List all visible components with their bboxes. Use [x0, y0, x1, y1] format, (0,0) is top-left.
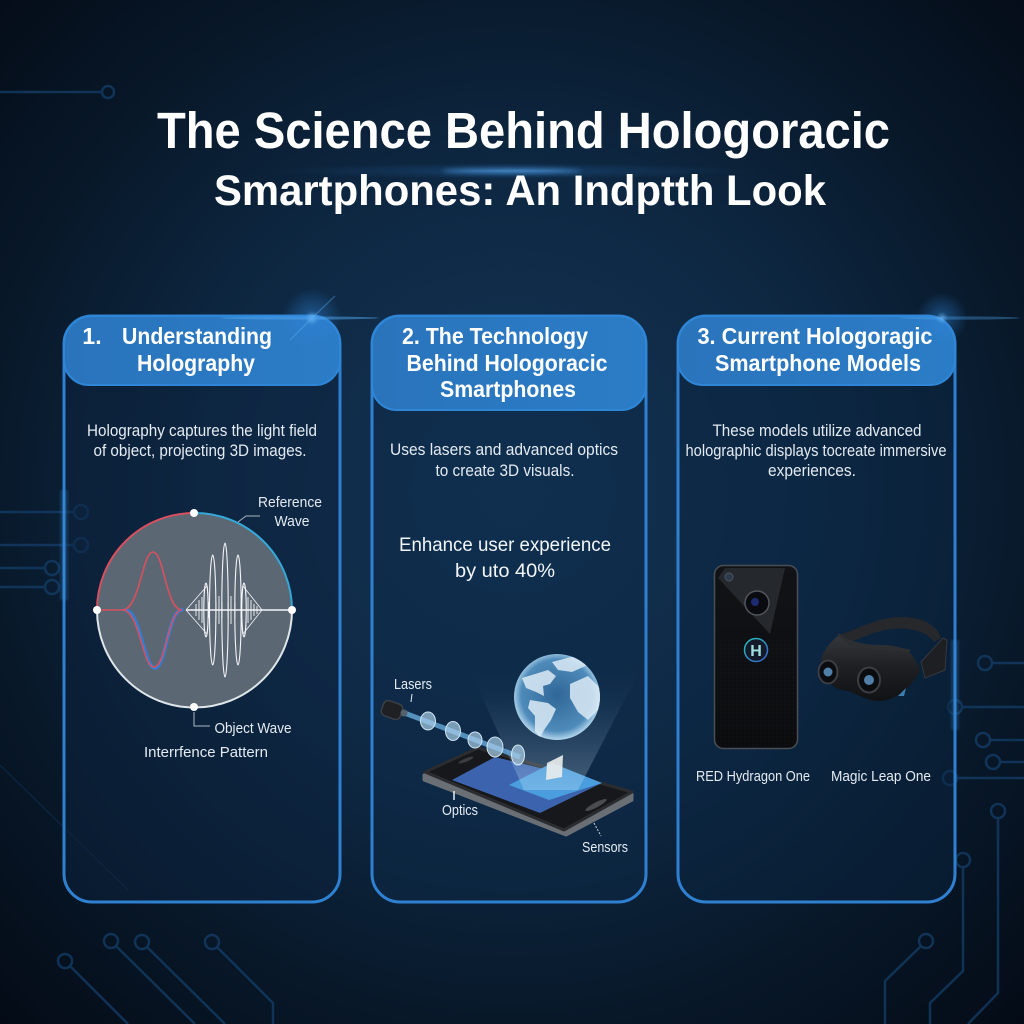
hologram illustration: [380, 654, 640, 856]
panel 1 description: Holography captures the light field: [87, 422, 317, 440]
projected plate: [546, 755, 563, 780]
panel 2 header: [372, 316, 646, 410]
title: Smartphones: An Indptth Look: [214, 167, 826, 215]
panel 2 description: Uses lasers and advanced optics: [390, 441, 618, 459]
lasers label: Lasers: [394, 677, 432, 693]
object wave and reference wave curves: [97, 552, 182, 668]
title: The Science Behind Hologoracic: [157, 102, 890, 159]
title glow: [272, 163, 752, 179]
object wave label: Object Wave: [214, 721, 292, 737]
panel 2 header: 2. The Technology: [402, 323, 588, 349]
panel 3 description: experiences.: [768, 462, 856, 480]
panel: technology: [372, 316, 646, 902]
statistic callout: [399, 534, 611, 582]
panel 2 description: to create 3D visuals.: [436, 462, 574, 480]
optics label: Optics: [442, 803, 478, 819]
diagram nodes: [93, 509, 296, 711]
panel 1 description: of object, projecting 3D images.: [94, 442, 306, 460]
panel 2 header: Behind Hologoracic: [406, 350, 608, 376]
statistic callout: Enhance user experience: [399, 534, 611, 556]
panel 2 header: Smartphones: [440, 376, 576, 402]
optics label: [442, 791, 478, 819]
panel 1 header: [64, 316, 340, 385]
product labels: RED Hydragon One: [696, 769, 810, 785]
panel: understanding holography: [64, 316, 340, 902]
interference pattern label: Interrfence Pattern: [144, 745, 268, 761]
panel 1 description: [87, 422, 317, 460]
panel 3 description: holographic displays tocreate immersive: [686, 442, 946, 460]
panel 3 header: [678, 316, 955, 385]
product labels: [696, 769, 931, 785]
reference wave label: Wave: [274, 514, 310, 530]
logo: [744, 638, 768, 662]
logo: H: [750, 643, 762, 660]
panel 1 header: Understanding: [122, 323, 272, 349]
panel 3 description: [686, 422, 946, 480]
laser emitter and lens train: [380, 699, 524, 765]
panel edge and corner glows: [60, 288, 1020, 730]
statistic callout: by uto 40%: [455, 560, 555, 582]
reference wave label: [238, 495, 322, 530]
panel 3 header: Smartphone Models: [715, 350, 921, 376]
reference wave label: Reference: [258, 495, 322, 511]
product labels: Magic Leap One: [831, 769, 931, 785]
interference diagram: [93, 495, 322, 761]
title: [157, 102, 890, 215]
holographic globe: [514, 654, 604, 740]
panel 2 description: [390, 441, 618, 480]
phone: RED Hydrogon One: [714, 566, 798, 748]
sensors label: [582, 823, 628, 856]
lasers label: [394, 677, 432, 702]
panel 1 header: Holography: [137, 350, 255, 376]
sensors label: Sensors: [582, 840, 628, 856]
smartphone: [424, 748, 632, 835]
panel 3 description: These models utilize advanced: [712, 422, 922, 440]
panel: current models: [678, 316, 955, 902]
interference waveform: [186, 543, 292, 677]
headset: Magic Leap One: [818, 617, 947, 701]
object wave label: [194, 712, 292, 737]
panel 1 header: 1.: [82, 323, 102, 349]
projection beam: [470, 670, 640, 790]
panel 3 header: 3. Current Hologoragic: [698, 323, 933, 349]
